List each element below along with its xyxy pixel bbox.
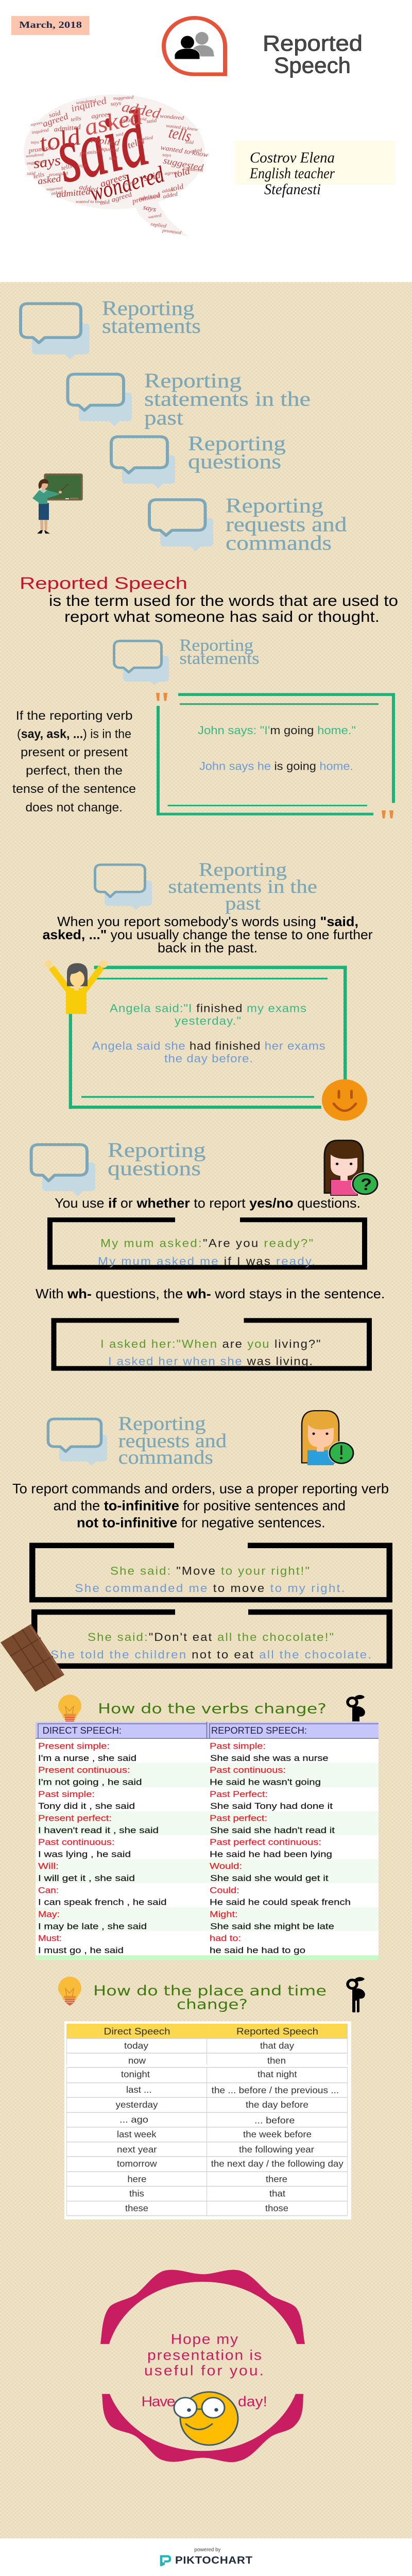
icon: blonde girl with exclamation mark <box>302 1411 355 1465</box>
panel: black frame command example <box>32 1546 389 1600</box>
icon: smiley with glasses <box>174 2392 238 2445</box>
word cloud speech bubble: promised <box>131 191 161 206</box>
panel: black frame negative command example: She told the children not to eat all the chocolate. <box>50 1648 371 1661</box>
menu item: reporting statements in the past <box>68 369 311 429</box>
word cloud speech bubble: wondered <box>87 162 168 207</box>
table: verb tense changes: She said she was a nurse <box>210 1753 329 1763</box>
panel: black frame wh- example: I asked her when she was living. <box>108 1355 313 1367</box>
panel: black frame yes/no example <box>50 1220 365 1267</box>
closing message: Hope my <box>171 2332 238 2347</box>
table: place and time changes <box>64 2021 351 2219</box>
table: verb tense changes: I may be late , she said <box>38 1921 147 1931</box>
word cloud speech bubble: asked <box>190 147 202 154</box>
table: verb tense changes: May: <box>38 1909 60 1919</box>
panel: black frame yes/no example: My mum asked me if I was ready. <box>98 1255 315 1267</box>
table: place and time changes: that day <box>260 2041 295 2050</box>
word cloud speech bubble: told <box>109 156 117 161</box>
section heading: reporting statements in the past: statements in the <box>168 876 317 897</box>
text: tense change rule: When you report somebody's words using "said, <box>57 914 358 929</box>
heading: how do the place and time change: change? <box>177 1996 248 2012</box>
icon: light bulb <box>58 1977 81 2006</box>
table: place and time changes: that <box>269 2189 285 2198</box>
word cloud speech bubble: wondered <box>160 113 184 121</box>
word cloud speech bubble: said <box>143 170 162 183</box>
table: place and time changes: Reported Speech <box>236 2027 318 2037</box>
table: verb tense changes: REPORTED SPEECH: <box>211 1726 307 1736</box>
table: place and time changes: the following year <box>239 2145 314 2155</box>
table: place and time changes: yesterday <box>115 2100 158 2110</box>
table: verb tense changes: Past simple: <box>210 1741 266 1751</box>
menu item: reporting statements in the past: Reporting <box>144 369 242 392</box>
text: reporting verb rule: If the reporting verb <box>16 709 133 723</box>
word cloud speech bubble: tells <box>126 136 146 151</box>
icon: chocolate bar <box>1 1624 64 1692</box>
table: place and time changes: here <box>127 2174 146 2184</box>
word cloud speech bubble: says <box>142 204 157 214</box>
title: Reported <box>263 30 363 56</box>
table: place and time changes: the ... before / the previous ... <box>212 2086 339 2095</box>
panel: black frame negative command example <box>35 1612 389 1666</box>
icon: orange smiley <box>322 1079 367 1121</box>
word cloud speech bubble: inquired <box>98 146 119 153</box>
word cloud speech bubble: admitted <box>139 193 161 202</box>
table: place and time changes: now <box>128 2056 146 2065</box>
table: verb tense changes: She said she hadn't read it <box>210 1825 335 1835</box>
text: commands rule <box>12 1481 389 1530</box>
table: place and time changes: then <box>267 2056 286 2065</box>
word cloud speech bubble: suggested <box>26 159 45 165</box>
word cloud speech bubble: added <box>162 187 175 194</box>
heading: reported speech definition: report what someone has said or thought. <box>64 608 380 625</box>
text: tense change rule <box>43 914 373 955</box>
menu item: reporting statements: statements <box>102 315 201 338</box>
table: place and time changes: tomorrow <box>117 2159 157 2169</box>
closing message: Have <box>141 2394 175 2410</box>
word cloud speech bubble: told <box>173 166 192 180</box>
word cloud speech bubble: wanted to know <box>166 123 199 132</box>
panel: green frame with past example: Angela said:"I finished my exams <box>110 1002 306 1014</box>
author box: Costrov Elena <box>250 149 335 166</box>
text: reporting verb rule: perfect, then the <box>26 764 123 777</box>
word cloud speech bubble: agreed <box>41 111 70 129</box>
table: place and time changes: ... ago <box>119 2115 148 2125</box>
section heading: reporting requests and commands <box>48 1412 227 1468</box>
panel: black frame wh- example <box>54 1320 369 1368</box>
word cloud speech bubble: added <box>78 183 99 194</box>
icon: woman with raised arms <box>44 960 108 1014</box>
table: verb tense changes: He said he wasn't going <box>210 1777 321 1787</box>
word cloud speech bubble: tells <box>71 115 82 123</box>
panel: green frame with statement example: John says: "I'm going home." <box>198 724 356 737</box>
table: verb tense changes: She said she would get it <box>210 1873 329 1883</box>
table: place and time changes: the week before <box>243 2129 312 2140</box>
heading: how do the verbs change: How do the verbs change? <box>98 1701 327 1717</box>
word cloud speech bubble: told <box>139 116 147 122</box>
closing message: day! <box>238 2394 267 2410</box>
table: place and time changes: next year <box>117 2145 157 2155</box>
table: verb tense changes: Past perfect continuous: <box>210 1837 321 1847</box>
word cloud speech bubble: told <box>170 182 184 193</box>
table: place and time changes: that night <box>258 2070 297 2079</box>
table: verb tense changes: I haven't read it , she said <box>38 1825 159 1835</box>
word cloud speech bubble: suggested <box>162 156 204 173</box>
author box <box>234 141 396 197</box>
heading: reported speech definition: is the term used for the words that are used to <box>49 592 398 609</box>
word cloud speech bubble: says <box>162 152 171 158</box>
table: verb tense changes: Present continuous: <box>38 1765 130 1775</box>
closing message: useful for you. <box>144 2363 264 2379</box>
table: verb tense changes: had to: <box>210 1933 241 1943</box>
word cloud speech bubble: agreed <box>110 191 133 204</box>
word cloud speech bubble: told <box>185 140 194 145</box>
word cloud speech bubble: wanted to know <box>76 199 105 204</box>
table: verb tense changes: Past simple: <box>38 1789 95 1799</box>
section heading: reporting questions: Reporting <box>108 1139 205 1162</box>
author box: Stefanesti <box>264 180 321 197</box>
icon: thinking figure <box>348 1695 365 1721</box>
panel: black frame yes/no example: My mum asked:"Are you ready?" <box>100 1237 313 1249</box>
word cloud speech bubble: wanted <box>148 213 162 219</box>
table: place and time changes: the next day / the following day <box>211 2159 344 2169</box>
word cloud speech bubble: promised <box>162 228 182 235</box>
menu item: reporting statements in the past: past <box>144 406 183 429</box>
word cloud speech bubble: says <box>32 152 62 172</box>
word cloud speech bubble: told <box>99 199 110 207</box>
menu item: reporting requests and commands: commands <box>226 532 332 555</box>
icon: teacher at chalkboard <box>32 474 82 534</box>
table: verb tense changes: Present perfect: <box>38 1813 112 1823</box>
text: commands rule: not to-infinitive for negative sentences. <box>77 1515 325 1530</box>
word cloud speech bubble: said <box>27 171 36 176</box>
table: verb tense changes: He said he could speak french <box>210 1897 351 1907</box>
word cloud speech bubble: replied <box>150 222 167 229</box>
word cloud speech bubble: admitted <box>54 123 81 133</box>
panel: green frame with past example <box>69 966 347 1109</box>
footer: powered by piktochart: PIKTOCHART <box>175 2555 252 2566</box>
text: reporting verb rule: (say, ask, ...) is in the <box>17 727 131 741</box>
word cloud speech bubble: said <box>46 95 157 199</box>
table: verb tense changes: Can: <box>38 1885 59 1895</box>
word cloud speech bubble: agrees <box>91 110 111 120</box>
icon: girl with question mark <box>324 1141 379 1196</box>
table: place and time changes: last ... <box>126 2085 152 2095</box>
author box: English teacher <box>249 164 335 181</box>
word cloud speech bubble: suggested <box>113 95 134 101</box>
word cloud speech bubble: told <box>36 123 83 157</box>
word cloud speech bubble: promised <box>48 171 68 178</box>
decorative ring: crimson wavy badge <box>100 2270 305 2462</box>
panel: black frame command example: She said: "Move to your right!" <box>110 1565 310 1577</box>
table: verb tense changes: Might: <box>210 1909 238 1919</box>
table: verb tense changes: Must: <box>38 1933 62 1943</box>
table: verb tense changes <box>36 1722 379 1960</box>
icon: girl with question mark: ? <box>360 1176 372 1194</box>
heading: how do the place and time change <box>93 1982 327 2012</box>
word cloud speech bubble: said <box>115 131 124 137</box>
closing message: presentation is <box>147 2347 262 2363</box>
word cloud speech bubble: wanted to know <box>160 144 209 159</box>
icon: light bulb <box>58 1694 81 1722</box>
word cloud speech bubble: admitted <box>56 187 91 199</box>
word cloud speech bubble: asked <box>123 180 135 187</box>
table: place and time changes: ... before <box>254 2115 295 2125</box>
word cloud speech bubble: said <box>48 109 62 119</box>
panel: black frame wh- example: I asked her:"When are you living?" <box>100 1337 320 1350</box>
section heading: reporting requests and commands: Reporting <box>118 1412 206 1434</box>
text: if or whether rule: You use if or whether to report yes/no questions. <box>55 1196 360 1211</box>
table: verb tense changes: Present simple: <box>38 1741 110 1751</box>
menu item: reporting questions: Reporting <box>188 432 286 455</box>
word cloud speech bubble: asked <box>81 103 146 141</box>
icon: thinking figure <box>348 1977 365 2012</box>
word cloud speech bubble: replied <box>139 135 153 143</box>
word cloud speech bubble: says <box>110 100 122 107</box>
menu item: reporting statements <box>21 297 201 360</box>
table: verb tense changes: Past perfect: <box>210 1813 267 1823</box>
word cloud speech bubble: inquired <box>31 127 49 135</box>
word cloud speech bubble: tells <box>167 124 193 145</box>
table: place and time changes: today <box>124 2041 149 2050</box>
word cloud speech bubble <box>24 94 209 236</box>
panel: black frame command example: She commanded me to move to my right. <box>75 1582 345 1595</box>
word cloud speech bubble: agreed <box>164 170 179 176</box>
word cloud speech bubble: suggested <box>46 185 63 191</box>
table: verb tense changes: I can speak french , he said <box>38 1897 167 1907</box>
text: wh- questions rule: With wh- questions, the wh- word stays in the sentence. <box>36 1286 385 1301</box>
table: verb tense changes: Will: <box>38 1861 59 1871</box>
heading: reported speech definition <box>20 574 398 625</box>
word cloud speech bubble: says <box>31 140 39 144</box>
table: verb tense changes: Could: <box>210 1885 239 1895</box>
menu item: reporting statements in the past: statements in the <box>144 387 311 411</box>
word cloud speech bubble: wondered <box>25 152 44 159</box>
table: place and time changes: there <box>266 2174 287 2184</box>
panel: green frame with statement example: John says he is going home. <box>199 760 353 772</box>
menu item: reporting statements: Reporting <box>102 297 195 320</box>
title <box>263 30 363 78</box>
word cloud speech bubble: added <box>162 191 179 200</box>
footer: powered by piktochart <box>161 2547 252 2566</box>
footer: powered by piktochart: powered by <box>195 2547 221 2553</box>
menu item: reporting questions: questions <box>188 450 281 473</box>
text: commands rule: To report commands and orders, use a proper reporting verb <box>12 1481 389 1496</box>
heading: reported speech definition: Reported Speech <box>20 574 187 593</box>
section heading: reporting questions <box>31 1139 205 1196</box>
table: verb tense changes: I was lying , he said <box>38 1849 131 1859</box>
table: verb tense changes: Past continuous: <box>38 1837 114 1847</box>
table: place and time changes: the day before <box>246 2100 308 2110</box>
word cloud speech bubble: added <box>120 99 162 122</box>
table: verb tense changes: Past continuous: <box>210 1765 286 1775</box>
table: place and time changes: those <box>265 2204 288 2213</box>
panel: green frame with statement example <box>156 693 395 819</box>
menu item: reporting requests and commands: Reporting <box>226 494 323 517</box>
text: reporting verb rule: does not change. <box>26 801 123 815</box>
heading: how do the place and time change: How do the place and time <box>93 1982 327 1999</box>
table: verb tense changes: I'm not going , he said <box>38 1777 142 1787</box>
panel: green frame with past example: yesterday." <box>175 1014 241 1027</box>
table: verb tense changes: Tony did it , she said <box>38 1801 135 1811</box>
word cloud speech bubble: says <box>77 163 86 168</box>
section heading: reporting statements: Reporting <box>179 636 253 654</box>
word cloud speech bubble: replied <box>90 134 121 148</box>
section heading: reporting requests and commands: commands <box>118 1446 213 1468</box>
panel: black frame negative command example: She said:"Don't eat all the chocolate!" <box>88 1631 334 1643</box>
word cloud speech bubble: asked <box>51 189 63 196</box>
text: tense change rule: back in the past. <box>158 941 258 955</box>
word cloud speech bubble: inquired <box>70 95 108 114</box>
table: verb tense changes: I must go , he said <box>38 1945 124 1955</box>
text: tense change rule: asked, ..." you usually change the tense to one further <box>43 927 373 942</box>
section heading: reporting statements in the past: Reporting <box>199 859 287 880</box>
table: place and time changes: these <box>125 2204 148 2213</box>
text: commands rule: and the to-infinitive for positive sentences and <box>54 1498 346 1513</box>
menu item: reporting questions <box>111 432 286 488</box>
table: verb tense changes: He said he had been lying <box>210 1849 332 1859</box>
date tag <box>11 16 90 35</box>
table: verb tense changes: I'm a nurse , she said <box>38 1753 136 1763</box>
word cloud speech bubble: asked <box>118 115 136 125</box>
text: reporting verb rule: tense of the sentence <box>12 782 136 796</box>
table: verb tense changes: She said she might be late <box>210 1921 334 1931</box>
word cloud speech bubble: said <box>146 117 157 125</box>
table: verb tense changes: She said Tony had done it <box>210 1801 333 1811</box>
table: place and time changes: Direct Speech <box>104 2027 170 2037</box>
word cloud speech bubble: wondered <box>183 166 203 173</box>
section heading: reporting statements in the past: past <box>225 893 261 914</box>
table: verb tense changes: Past Perfect: <box>210 1789 268 1799</box>
table: verb tense changes: I will get it , she said <box>38 1873 135 1883</box>
section heading: reporting statements in the past <box>95 859 317 914</box>
word cloud speech bubble: agrees <box>30 120 43 127</box>
section heading: reporting statements <box>114 636 260 685</box>
table: verb tense changes: he said he had to go <box>210 1945 305 1955</box>
section heading: reporting statements: statements <box>179 649 259 668</box>
word cloud speech bubble: promises <box>27 144 55 154</box>
word cloud speech bubble: tells <box>32 171 45 180</box>
closing message <box>141 2332 267 2410</box>
table: place and time changes: this <box>129 2189 144 2198</box>
word cloud speech bubble: tells <box>60 162 73 172</box>
table: place and time changes: tonight <box>121 2070 150 2079</box>
panel: green frame with past example: the day before. <box>164 1052 253 1065</box>
panel: green frame with past example: Angela said she had finished her exams <box>92 1039 325 1052</box>
menu item: reporting requests and commands <box>149 494 347 555</box>
table: place and time changes: last week <box>117 2129 157 2140</box>
title: Speech <box>274 53 351 78</box>
word cloud speech bubble: promises <box>79 148 102 157</box>
icon: two people in drop shape <box>164 18 225 74</box>
word cloud speech bubble: agrees <box>98 171 128 190</box>
word cloud speech bubble: wondered <box>76 98 96 106</box>
section heading: reporting requests and commands: requests and <box>118 1430 227 1451</box>
text: reporting verb rule: present or present <box>21 745 128 759</box>
word cloud speech bubble: asked <box>37 174 62 187</box>
menu item: reporting requests and commands: requests and <box>226 513 347 536</box>
text: reporting verb rule <box>12 709 136 815</box>
table: verb tense changes: DIRECT SPEECH: <box>43 1726 122 1736</box>
date tag: March, 2018 <box>19 20 82 30</box>
section heading: reporting questions: questions <box>108 1157 201 1180</box>
table: verb tense changes: Would: <box>210 1861 242 1871</box>
